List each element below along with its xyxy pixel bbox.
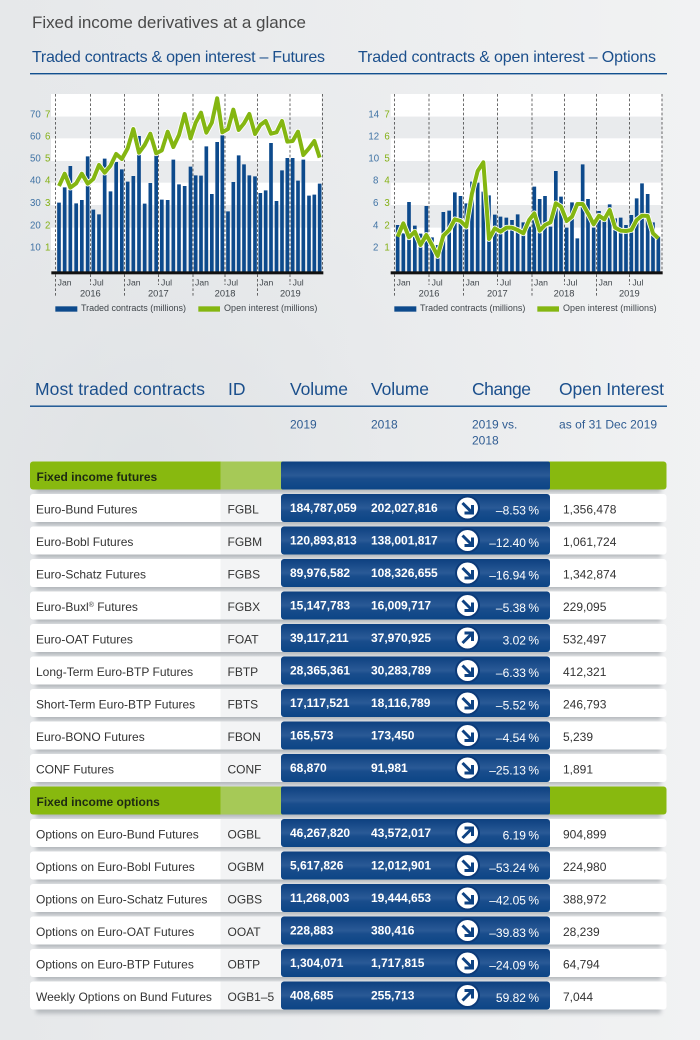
axis labels: left: 1 <box>45 242 50 253</box>
axis labels: time: Jul <box>93 277 104 287</box>
axis labels: time: Jan <box>397 277 411 287</box>
row: Options on Euro-Bobl Futures <box>30 852 666 882</box>
row: Euro-OAT Futures: 532,497 <box>563 632 607 646</box>
axis labels: time: 2017 <box>148 289 169 299</box>
row: Options on Euro-OAT Futures <box>30 916 666 948</box>
line: open interest <box>398 162 658 256</box>
row: Euro-Buxl Futures: ® <box>89 601 95 609</box>
axis labels: time: Jan <box>58 277 72 287</box>
row: Euro-BONO Futures: FBON <box>228 730 261 744</box>
line: open interest <box>59 98 320 188</box>
row: Options on Euro-Bund Futures: 6.19 % <box>503 828 539 842</box>
row: Short-Term Euro-BTP Futures: 17,117,521 <box>290 696 350 710</box>
row: CONF Futures: 1,891 <box>563 762 593 776</box>
axis labels: time: Jan <box>534 277 548 287</box>
axis labels: left: 20 <box>30 220 41 231</box>
row: Euro-Bobl Futures <box>30 526 666 558</box>
axis labels: time: 2019 <box>280 289 301 299</box>
row: Options on Euro-OAT Futures: 28,239 <box>563 925 600 939</box>
axis labels: left: 6 <box>373 198 378 209</box>
row: Options on Euro-Bund Futures: Options on Euro-Bund Futures <box>36 828 199 842</box>
row: Euro-Buxl Futures <box>30 592 666 622</box>
axis labels: left: 3 <box>45 198 50 209</box>
axis labels: left: 12 <box>368 131 379 142</box>
axis labels: left: 10 <box>368 154 379 165</box>
row: Long-Term Euro-BTP Futures <box>30 656 666 688</box>
legend: Open interest (millions) <box>563 303 657 313</box>
axis labels: time: Jan <box>127 277 141 287</box>
row: Euro-Bund Futures: –8.53 % <box>496 504 539 518</box>
table header: 2019 vs. <box>472 418 517 432</box>
legend <box>394 303 657 313</box>
row: Options on Euro-OAT Futures: OOAT <box>228 925 261 939</box>
row: Euro-Bobl Futures: 1,061,724 <box>563 535 617 549</box>
row: Weekly Options on Bund Futures: 255,713 <box>371 988 415 1002</box>
row: Options on Euro-Bobl Futures: 12,012,901 <box>371 858 431 872</box>
axis labels: time: Jul <box>566 277 577 287</box>
row: CONF Futures: CONF <box>228 762 262 776</box>
row: Euro-BONO Futures: Euro-BONO Futures <box>36 730 145 744</box>
axis labels: time: 2016 <box>419 289 439 299</box>
row: Options on Euro-Schatz Futures <box>30 884 666 915</box>
row: Options on Euro-Schatz Futures: OGBS <box>228 892 262 906</box>
row: Options on Euro-Schatz Futures: Options on Euro-Schatz Futures <box>36 892 207 906</box>
section: Fixed income options <box>30 786 666 818</box>
row: Short-Term Euro-BTP Futures: Short-Term Euro-BTP Futures <box>36 698 195 712</box>
axis labels: time: Jan <box>599 277 613 287</box>
axis labels: time: 2017 <box>487 289 508 299</box>
axis labels: time: 2018 <box>215 289 235 299</box>
axis labels: left: 40 <box>30 176 41 187</box>
row: Euro-Bobl Futures: –12.40 % <box>489 536 539 550</box>
table header: 2019 <box>290 418 317 432</box>
row: Options on Euro-BTP Futures: 1,304,071 <box>290 956 344 970</box>
axis labels: time: 2016 <box>80 289 101 299</box>
axis labels: left: 14 <box>368 109 380 120</box>
table header: as of 31 Dec 2019 <box>559 418 657 432</box>
row: Weekly Options on Bund Futures: 59.82 % <box>496 991 539 1005</box>
row: Long-Term Euro-BTP Futures: FBTP <box>228 665 258 679</box>
row: Euro-Buxl Futures: –5.38 % <box>496 601 539 615</box>
axis labels: left: 2 <box>45 220 50 231</box>
axis labels: left: 8 <box>373 176 378 187</box>
row: CONF Futures: CONF Futures <box>36 762 114 776</box>
row: Euro-BONO Futures <box>30 722 666 752</box>
row: Options on Euro-Bobl Futures: 5,617,826 <box>290 858 344 872</box>
section: Fixed income options: Fixed income options <box>36 795 160 809</box>
legend: Traded contracts (millions) <box>420 303 525 313</box>
row: Euro-Schatz Futures: Euro-Schatz Futures <box>36 568 146 582</box>
row: Euro-Schatz Futures <box>30 559 666 590</box>
title: Fixed income derivatives at a glance <box>32 13 306 32</box>
row: CONF Futures: –25.13 % <box>489 764 539 778</box>
row: Options on Euro-OAT Futures: 228,883 <box>290 924 334 938</box>
axis labels: left: 1 <box>384 242 390 253</box>
row: Euro-Buxl Futures: 15,147,783 <box>290 598 350 612</box>
row: CONF Futures: 68,870 <box>290 761 327 775</box>
axis labels: time: Jan <box>466 277 480 287</box>
row: Options on Euro-Bund Futures <box>30 819 666 850</box>
row: Euro-BONO Futures: –4.54 % <box>496 731 539 745</box>
row: Options on Euro-BTP Futures: 1,717,815 <box>371 956 425 970</box>
row: Options on Euro-OAT Futures: Options on Euro-OAT Futures <box>36 925 194 939</box>
row: Options on Euro-Bund Futures: OGBL <box>228 828 261 842</box>
row: Weekly Options on Bund Futures <box>30 982 666 1014</box>
bars: traded contracts <box>59 135 320 272</box>
axis labels: left: 4 <box>384 176 390 187</box>
row: Options on Euro-BTP Futures: –24.09 % <box>489 958 539 972</box>
table header: Most traded contracts <box>35 379 205 399</box>
row: Options on Euro-Schatz Futures: –42.05 % <box>489 894 539 908</box>
row: Euro-Bund Futures: 202,027,816 <box>371 501 438 515</box>
row: Long-Term Euro-BTP Futures: 30,283,789 <box>371 664 431 678</box>
table header: 2018 <box>371 418 398 432</box>
row: Weekly Options on Bund Futures: Weekly Options on Bund Futures <box>36 990 212 1004</box>
row: Options on Euro-Schatz Futures: 388,972 <box>563 892 607 906</box>
row: Euro-OAT Futures: FOAT <box>228 632 259 646</box>
heading: options chart: Traded contracts & open interest – Options <box>358 49 656 66</box>
legend <box>55 303 317 313</box>
row: Euro-Bund Futures: 184,787,059 <box>290 501 357 515</box>
table header: ID <box>228 379 246 399</box>
row: Long-Term Euro-BTP Futures: 412,321 <box>563 665 607 679</box>
section: Fixed income futures <box>30 462 666 492</box>
axis labels: time: Jul <box>500 277 511 287</box>
axis labels: left <box>368 109 390 253</box>
row: Weekly Options on Bund Futures: 408,685 <box>290 988 334 1002</box>
table header: 2018 <box>472 434 499 448</box>
row: Euro-Schatz Futures: 89,976,582 <box>290 566 350 580</box>
row: Euro-OAT Futures: 39,117,211 <box>290 631 349 645</box>
row: Options on Euro-Bobl Futures: Options on Euro-Bobl Futures <box>36 860 195 874</box>
row: Euro-BONO Futures: 173,450 <box>371 728 415 742</box>
row: Euro-OAT Futures: 3.02 % <box>503 634 539 648</box>
axis labels: left: 6 <box>45 131 50 142</box>
row: Options on Euro-BTP Futures: Options on Euro-BTP Futures <box>36 958 194 972</box>
row: CONF Futures <box>30 754 666 785</box>
row: Short-Term Euro-BTP Futures: –5.52 % <box>496 698 539 712</box>
bars: traded contracts <box>398 164 658 272</box>
row: Euro-Buxl Futures: Euro-Buxl <box>36 600 89 614</box>
row: Weekly Options on Bund Futures: 7,044 <box>563 990 593 1004</box>
row: Euro-BONO Futures: 165,573 <box>290 728 334 742</box>
row: Euro-Bobl Futures: FGBM <box>228 535 262 549</box>
legend: Open interest (millions) <box>224 303 317 313</box>
row: Options on Euro-OAT Futures: 380,416 <box>371 924 415 938</box>
axis labels: time: Jul <box>161 277 172 287</box>
axis labels: left: 7 <box>384 109 390 120</box>
row: Short-Term Euro-BTP Futures: 18,116,789 <box>371 696 431 710</box>
row: Weekly Options on Bund Futures: OGB1–5 <box>228 990 275 1004</box>
table header: Volume <box>371 379 429 399</box>
legend: Traded contracts (millions) <box>81 303 186 313</box>
axis labels: left: 3 <box>384 198 390 209</box>
axis labels: left: 5 <box>45 154 50 165</box>
axis labels: left: 70 <box>30 109 41 120</box>
row: Euro-Bobl Futures: 120,893,813 <box>290 534 357 548</box>
axis labels: left: 60 <box>30 131 41 142</box>
axis labels: left: 30 <box>30 198 41 209</box>
row: Options on Euro-BTP Futures <box>30 949 666 980</box>
row: Options on Euro-Schatz Futures: 19,444,653 <box>371 891 431 905</box>
row: Options on Euro-BTP Futures: OBTP <box>228 958 260 972</box>
table header <box>30 379 667 448</box>
row: Euro-Bobl Futures: 138,001,817 <box>371 534 438 548</box>
row: Euro-Schatz Futures: 108,326,655 <box>371 566 438 580</box>
axis labels: left: 2 <box>373 242 378 253</box>
row: Options on Euro-Bobl Futures: OGBM <box>228 860 264 874</box>
row: Euro-Schatz Futures: FGBS <box>228 568 260 582</box>
axis labels: left <box>30 109 51 253</box>
axis labels: time: Jul <box>293 277 304 287</box>
row: Short-Term Euro-BTP Futures: FBTS <box>228 698 258 712</box>
row: Options on Euro-Schatz Futures: 11,268,003 <box>290 891 350 905</box>
axis labels: left: 4 <box>45 176 51 187</box>
row: Long-Term Euro-BTP Futures: Long-Term Euro-BTP Futures <box>36 665 193 679</box>
row: Euro-Buxl Futures: FGBX <box>228 600 260 614</box>
row: Options on Euro-Bobl Futures: –53.24 % <box>489 861 539 875</box>
row: Euro-Bund Futures: Euro-Bund Futures <box>36 502 137 516</box>
chart: options traded contracts and open interest <box>368 94 663 313</box>
axis labels: time: Jul <box>632 277 643 287</box>
row: Euro-Schatz Futures: –16.94 % <box>489 568 539 582</box>
row: Long-Term Euro-BTP Futures: –6.33 % <box>496 666 539 680</box>
axis labels: left: 2 <box>384 220 390 231</box>
row: Euro-Bund Futures: 1,356,478 <box>563 502 617 516</box>
row: Euro-OAT Futures: 37,970,925 <box>371 631 431 645</box>
axis labels: time: Jan <box>195 277 209 287</box>
row: Euro-Schatz Futures: 1,342,874 <box>563 568 617 582</box>
table header: Change <box>472 379 531 399</box>
heading: futures chart: Traded contracts & open interest – Futures <box>32 49 325 66</box>
row: Euro-BONO Futures: 5,239 <box>563 730 593 744</box>
row: Euro-OAT Futures <box>30 624 666 655</box>
axis labels: time <box>58 277 304 299</box>
axis labels: left: 5 <box>384 154 390 165</box>
axis labels: left: 50 <box>30 154 41 165</box>
axis labels: time: 2019 <box>619 289 640 299</box>
table header: Open Interest <box>559 379 664 399</box>
axis labels: time: 2018 <box>554 289 574 299</box>
row: Short-Term Euro-BTP Futures <box>30 689 666 720</box>
axis labels: left: 4 <box>373 220 379 231</box>
row: Euro-Bobl Futures: Euro-Bobl Futures <box>36 535 133 549</box>
row: Options on Euro-Bund Futures: 46,267,820 <box>290 826 350 840</box>
row: Options on Euro-Bobl Futures: 224,980 <box>563 860 607 874</box>
row: Euro-Buxl Futures: Futures <box>94 600 138 614</box>
row: Options on Euro-OAT Futures: –39.83 % <box>489 926 539 940</box>
axis labels: left: 10 <box>30 242 41 253</box>
row: Options on Euro-BTP Futures: 64,794 <box>563 958 600 972</box>
axis labels: time: Jul <box>432 277 443 287</box>
axis labels: time: Jan <box>259 277 273 287</box>
row: Short-Term Euro-BTP Futures: 246,793 <box>563 698 607 712</box>
table header: Volume <box>290 379 348 399</box>
axis labels: left: 6 <box>384 131 390 142</box>
chart: futures traded contracts and open interest <box>30 94 323 313</box>
section: Fixed income futures: Fixed income futures <box>36 470 158 484</box>
row: Euro-Bund Futures: FGBL <box>228 502 259 516</box>
row: CONF Futures: 91,981 <box>371 761 408 775</box>
axis labels: time <box>397 277 643 299</box>
row: Euro-OAT Futures: Euro-OAT Futures <box>36 632 133 646</box>
row: Long-Term Euro-BTP Futures: 28,365,361 <box>290 664 350 678</box>
axis labels: time: Jul <box>227 277 238 287</box>
row: Options on Euro-Bund Futures: 904,899 <box>563 828 607 842</box>
row: Euro-Bund Futures <box>30 494 666 525</box>
axis labels: left: 7 <box>45 109 50 120</box>
row: Euro-Buxl Futures: 229,095 <box>563 600 607 614</box>
row: Euro-Buxl Futures: 16,009,717 <box>371 598 431 612</box>
row: Options on Euro-Bund Futures: 43,572,017 <box>371 826 431 840</box>
